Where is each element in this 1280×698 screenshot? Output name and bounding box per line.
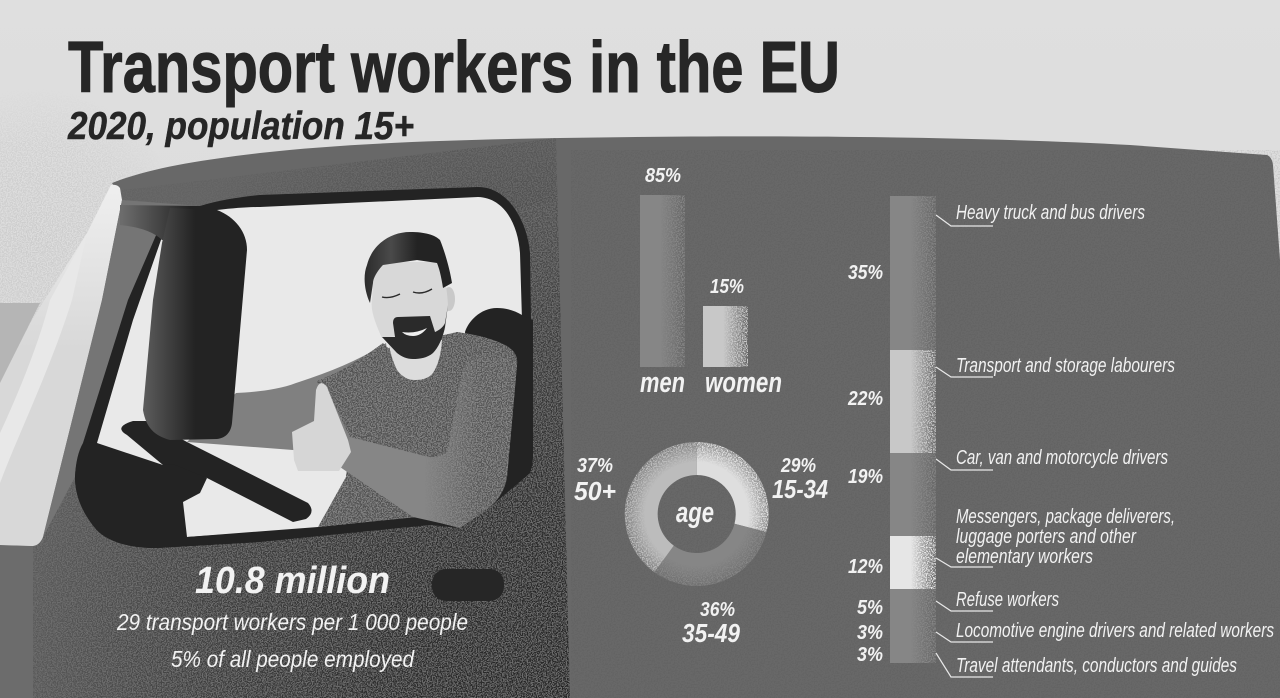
label 35-49: 35-49 [682, 618, 740, 648]
shirt speckle [317, 332, 517, 527]
label 50+: 37% [577, 455, 613, 477]
occupation labels: Transport and storage labourers [956, 355, 1175, 377]
occupation labels: Car, van and motorcycle drivers [956, 447, 1168, 469]
occupation labels: Messengers, package deliverers, [956, 506, 1175, 528]
steering wheel [121, 421, 312, 522]
windshield light reflection [0, 233, 87, 483]
total workers callout [116, 560, 468, 672]
gender labels: women [705, 367, 782, 399]
percentage labels: 3% [857, 644, 883, 666]
segment: transport and storage labourers [890, 350, 936, 453]
bar: women [703, 306, 748, 367]
hair [365, 232, 452, 303]
bar chart: gender [640, 165, 782, 399]
label 15-34: 15-34 [772, 474, 828, 504]
door lower panel base [0, 200, 570, 698]
percentage labels: 3% [857, 622, 883, 644]
segment 35-49 [654, 524, 766, 586]
total workers callout: 29 transport workers per 1 000 people [116, 609, 468, 635]
dashboard dark blob [75, 442, 260, 548]
subtitle: 2020, population 15+ [67, 105, 414, 148]
gender labels: 15% [710, 276, 744, 298]
door handle [432, 569, 504, 601]
total workers callout: 10.8 million [195, 560, 390, 602]
gender labels: 85% [645, 165, 681, 187]
driver far arm [187, 343, 400, 450]
percentage labels: 19% [848, 466, 883, 488]
mirror arm [120, 205, 205, 245]
label 15-34: 29% [780, 455, 816, 477]
window glass [97, 197, 522, 537]
percentage labels [847, 262, 883, 666]
side mirror [143, 208, 247, 440]
occupation labels [956, 202, 1274, 677]
stacked bar speckle [912, 196, 936, 663]
cab pillar [43, 200, 200, 537]
window frame [75, 187, 533, 548]
label 15-34 [772, 455, 828, 504]
leader lines [936, 215, 993, 677]
smile [402, 328, 427, 336]
seat headrest [465, 308, 533, 507]
percentage labels: 5% [857, 597, 883, 619]
title: Transport workers in the EU [68, 28, 840, 108]
label 50+: 50+ [574, 476, 616, 506]
bar: men [640, 195, 685, 367]
label 35-49 [682, 599, 740, 648]
background grain [0, 126, 127, 331]
windshield [0, 185, 122, 546]
label 35-49: 36% [700, 599, 735, 621]
gender labels [640, 165, 782, 399]
gender labels: men [640, 367, 685, 399]
donut centre label: age [676, 497, 714, 529]
percentage labels: 22% [847, 388, 883, 410]
stacked bar: occupations [847, 196, 1274, 677]
occupation labels: Refuse workers [956, 589, 1059, 611]
door speckle [33, 138, 570, 698]
driver near arm [340, 355, 517, 528]
segment: heavy truck and bus drivers [890, 196, 936, 350]
ear [443, 287, 455, 311]
face [372, 262, 448, 338]
segment: refuse, locomotive and travel workers [890, 589, 936, 663]
occupation labels: elementary workers [956, 546, 1093, 568]
segment: messengers and elementary workers [890, 536, 936, 589]
donut speckle [620, 440, 774, 590]
driver shirt [316, 332, 517, 528]
neck [388, 340, 442, 380]
thumbs up hand [292, 383, 351, 471]
eyes [382, 289, 432, 298]
body grain [571, 150, 1280, 698]
occupation labels: luggage porters and other [956, 526, 1137, 548]
segment 50+ [625, 442, 697, 572]
occupation labels: Heavy truck and bus drivers [956, 202, 1145, 224]
total workers callout: 5% of all people employed [171, 646, 415, 672]
distant grey building [0, 303, 40, 383]
percentage labels: 12% [848, 556, 883, 578]
segment 15-34 [697, 442, 769, 532]
label 50+ [574, 455, 616, 506]
segment: car, van and motorcycle drivers [890, 453, 936, 536]
illustration: cab window and driver [75, 187, 533, 548]
donut chart: age [574, 440, 828, 648]
percentage labels: 35% [848, 262, 883, 284]
beard [382, 305, 448, 359]
near arm speckle [434, 355, 517, 528]
